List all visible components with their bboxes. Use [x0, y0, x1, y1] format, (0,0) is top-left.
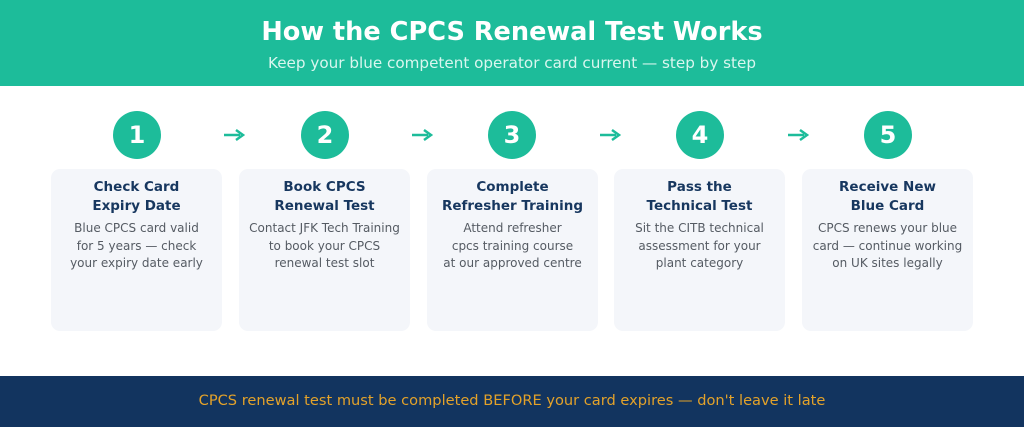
card 4: Technical Test: [647, 198, 752, 214]
card 1: Check Card: [94, 179, 179, 195]
step 1 circle: [113, 111, 161, 159]
card 4: [614, 169, 785, 331]
header: [0, 0, 1024, 86]
footer note: [0, 376, 1024, 427]
card 4: plant category: [656, 256, 743, 270]
card 3: Attend refresher: [463, 221, 562, 235]
arrow 1: [224, 129, 245, 141]
step 5 circle: [864, 111, 912, 159]
step 4 circle: [676, 111, 724, 159]
title: How the CPCS Renewal Test Works: [261, 17, 763, 47]
card 5: Receive New: [839, 179, 936, 195]
card 2: renewal test slot: [275, 256, 374, 270]
card 5: on UK sites legally: [832, 256, 943, 270]
arrow 3: [600, 129, 621, 141]
step 3 circle: [488, 111, 536, 159]
step 5 circle: 5: [880, 121, 896, 149]
arrow 4: [788, 129, 809, 141]
card 3: [427, 169, 598, 331]
card 3: Refresher Training: [442, 198, 583, 214]
card 4: assessment for your: [638, 238, 761, 252]
step 2 circle: 2: [317, 121, 333, 149]
card 1: for 5 years — check: [77, 238, 196, 252]
card 4: Sit the CITB technical: [635, 221, 764, 235]
card 2: Renewal Test: [274, 198, 375, 214]
card 4: Pass the: [667, 179, 732, 195]
step 3 circle: 3: [504, 121, 520, 149]
card 1: your expiry date early: [70, 256, 203, 270]
step 4 circle: 4: [692, 121, 708, 149]
subtitle: Keep your blue competent operator card current — step by step: [268, 54, 756, 72]
card 2: Book CPCS: [283, 179, 366, 195]
card 2: to book your CPCS: [269, 238, 380, 252]
step 2 circle: [301, 111, 349, 159]
card 1: Blue CPCS card valid: [74, 221, 199, 235]
card 5: card — continue working: [813, 238, 962, 252]
card 2: [239, 169, 410, 331]
card 3: Complete: [476, 179, 549, 195]
card 5: CPCS renews your blue: [818, 221, 957, 235]
card 1: Expiry Date: [92, 198, 181, 214]
card 5: Blue Card: [851, 198, 924, 214]
card 3: cpcs training course: [452, 238, 573, 252]
card 3: at our approved centre: [443, 256, 582, 270]
card 1: [51, 169, 222, 331]
card 2: Contact JFK Tech Training: [249, 221, 400, 235]
footer note: CPCS renewal test must be completed BEFORE your card expires — don't leave it late: [199, 392, 825, 409]
step 1 circle: 1: [129, 121, 145, 149]
card 5: [802, 169, 973, 331]
arrow 2: [412, 129, 433, 141]
